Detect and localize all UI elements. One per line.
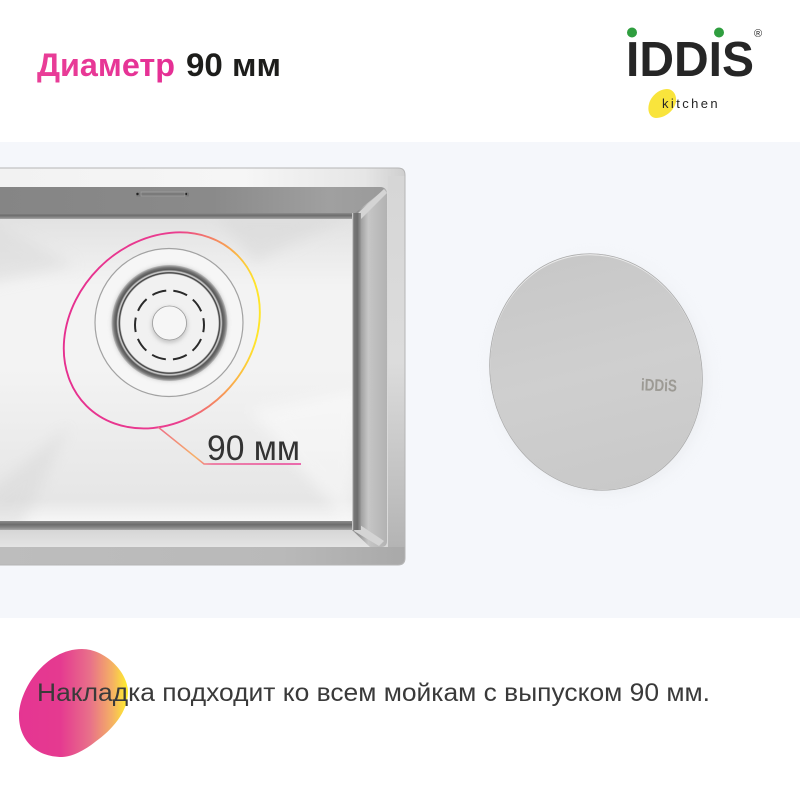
sink rim [0,168,405,565]
logo: IDDIS kitchen: kitchen [662,96,720,111]
basin corner creases [357,189,387,219]
title [37,47,281,83]
logo: IDDIS kitchen: ® [754,28,762,40]
drain flange [95,248,243,396]
disc logo: iDDiS [641,375,677,396]
title: Диаметр [37,47,175,83]
gradient blob [19,649,128,757]
basin floor [0,219,352,521]
gradient diameter outline [64,232,260,428]
cover disc [465,231,729,514]
sink [0,168,405,565]
leader line [158,427,301,464]
overflow slot [136,192,189,196]
label: 90 мм: 90 мм [207,429,300,468]
title: 90 мм [186,47,281,83]
drain strainer [112,265,228,381]
logo: IDDIS kitchen: IDDIS [626,33,754,87]
logo: IDDIS kitchen [626,28,762,118]
panel: product photo background [0,142,800,618]
basin grooves [0,213,355,219]
caption: Накладка подходит ко всем мойкам с выпуском 90 мм. [37,679,710,707]
sink basin walls [0,187,387,547]
